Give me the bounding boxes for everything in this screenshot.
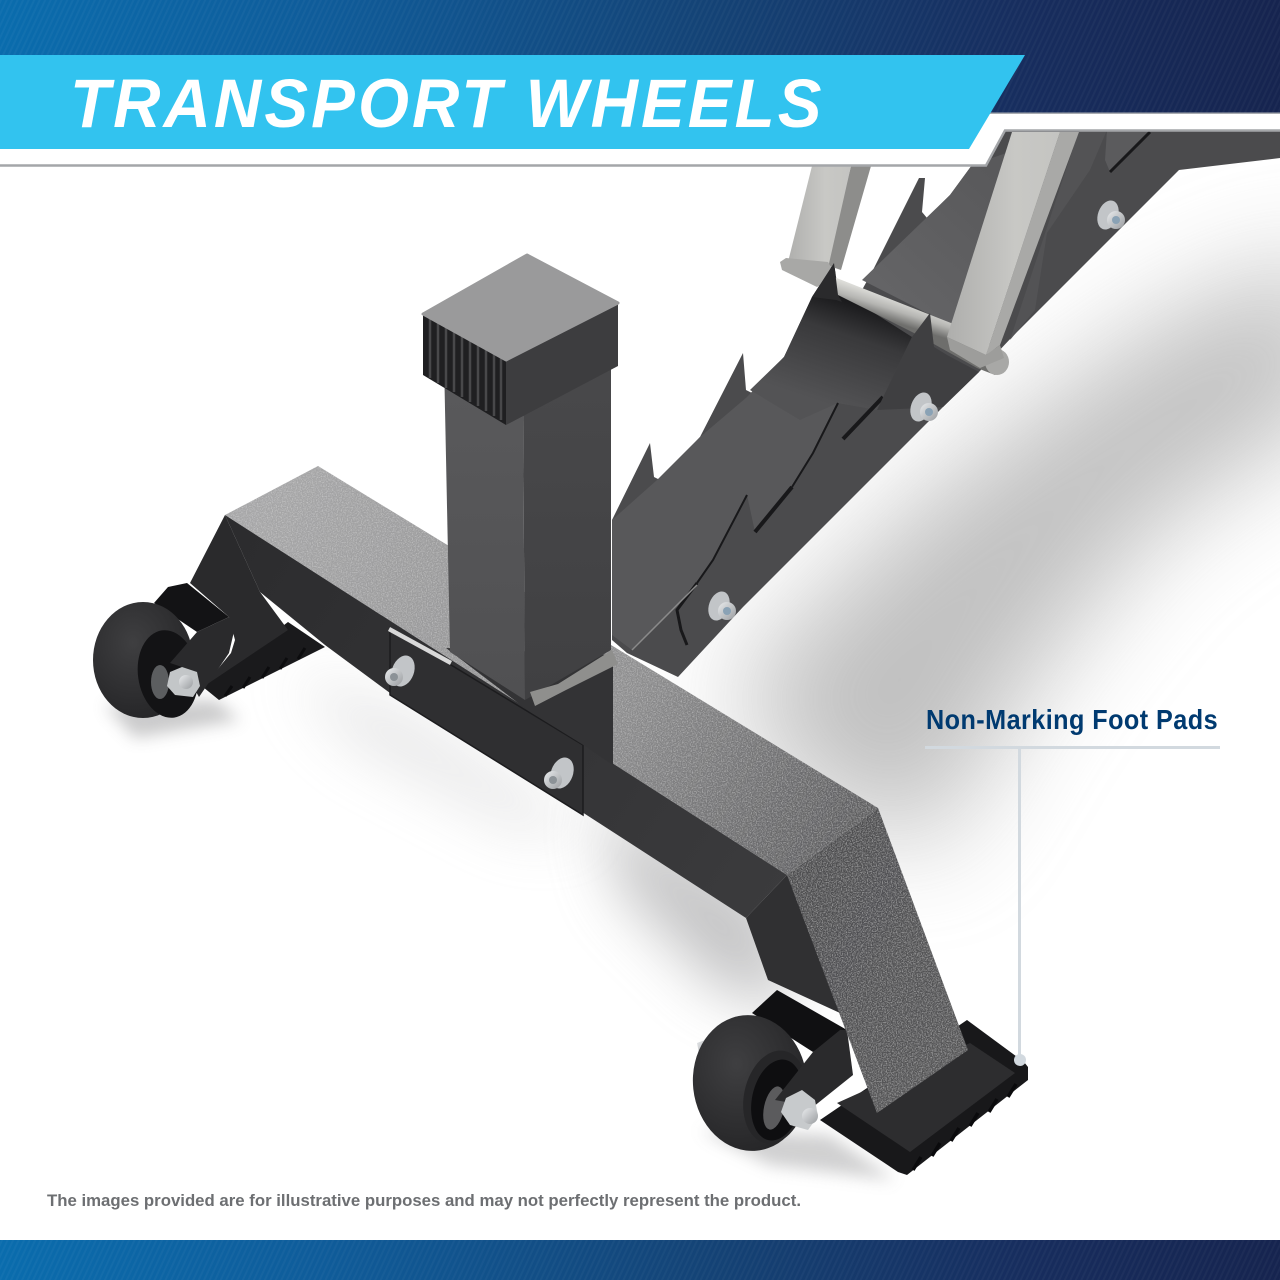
- lower channel surface: [612, 357, 880, 650]
- front tyre: [686, 1009, 814, 1157]
- left arm: [786, 166, 851, 268]
- top band: [0, 0, 1280, 114]
- silver adjustment frame: [780, 132, 1079, 410]
- weld at post base: [530, 650, 618, 706]
- right arm shaded side: [986, 132, 1079, 355]
- rear bracket arm: [170, 617, 235, 697]
- leg face textured: [787, 808, 968, 1113]
- rear hub: [132, 626, 204, 722]
- rear leg: [190, 515, 288, 687]
- wheel bracket arm: [775, 1030, 853, 1107]
- callout leader line: [1018, 749, 1021, 1060]
- callout label: Non-Marking Foot Pads: [926, 704, 1218, 735]
- plate bolts: [385, 652, 578, 792]
- shadowed channel near rod: [750, 263, 912, 420]
- tooth slots: [677, 132, 1150, 645]
- band edge: [988, 112, 1280, 114]
- cap right side: [506, 303, 618, 425]
- silver seam line: [632, 585, 697, 650]
- title banner: [0, 55, 1025, 149]
- header strip edge line: [0, 130, 1280, 166]
- rear tyre: [93, 602, 193, 718]
- rear bracket back: [154, 583, 229, 632]
- callout: non-marking foot pads: [925, 704, 1220, 1066]
- textured strip beside arm: [1010, 130, 1107, 340]
- right arm: [947, 132, 1060, 355]
- bottom band: [0, 1240, 1280, 1280]
- floor shadow: [105, 250, 1280, 1180]
- pad ribs: [913, 1084, 1016, 1170]
- top rail plate: [1105, 130, 1150, 172]
- inner leg face: [746, 875, 890, 1113]
- post end cap: [423, 255, 618, 425]
- front axle bolt: [781, 1090, 818, 1130]
- post base shadow: [446, 648, 613, 765]
- callout dot: [1014, 1054, 1026, 1066]
- front bracket plate: [390, 628, 583, 815]
- rear section of bench: toothed rail: [612, 129, 1280, 677]
- base frame: [225, 466, 968, 1113]
- disclaimer: The images provided are for illustrative purposes and may not perfectly represent the product.: [47, 1192, 801, 1210]
- base front face: [225, 515, 787, 918]
- upright post: [423, 255, 618, 765]
- cap top: [423, 255, 618, 360]
- post right face: [523, 340, 611, 700]
- bolts on rail: [704, 197, 1125, 624]
- white header strip: [0, 114, 1280, 165]
- foot pad: [820, 1020, 1028, 1175]
- base top face: [225, 466, 878, 875]
- tooth over rod right: [877, 313, 979, 410]
- cap ribs: [430, 318, 501, 420]
- callout rule: [925, 746, 1220, 749]
- cross rod: [834, 277, 1008, 375]
- upper channel surface: [862, 150, 1015, 330]
- front hub face: [735, 1045, 815, 1149]
- title: TRANSPORT WHEELS: [70, 65, 822, 142]
- rear foot pad: [203, 622, 325, 700]
- foot pad top: [837, 1043, 1015, 1152]
- post left face: [444, 360, 525, 700]
- left arm shaded side: [826, 166, 871, 270]
- lower left bend: [780, 258, 836, 287]
- rear axle nut: [697, 1037, 713, 1058]
- rail body: [612, 129, 1280, 677]
- plate highlight: [388, 627, 452, 665]
- tooth over rod left: [812, 263, 842, 302]
- bracket back: [752, 990, 847, 1052]
- rod end: [985, 349, 1009, 375]
- rear axle bolt: [167, 667, 200, 697]
- rear wheel assembly: [93, 515, 325, 722]
- cap ribbed side: [423, 314, 506, 425]
- front wheel assembly and foot pad: [686, 875, 1028, 1175]
